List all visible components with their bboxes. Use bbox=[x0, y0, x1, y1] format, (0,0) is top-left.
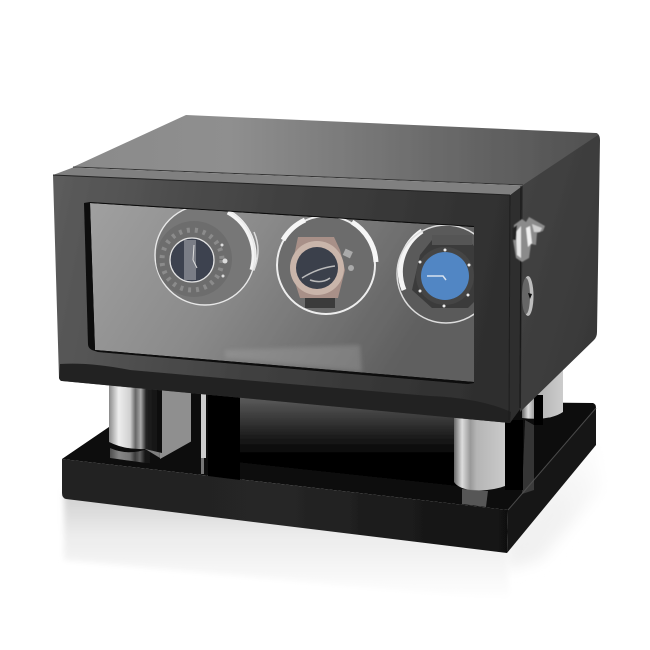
watch 2 bbox=[276, 215, 376, 315]
base right edge bbox=[507, 408, 596, 553]
box right side bbox=[520, 134, 600, 412]
floor reflection shadow bbox=[64, 435, 600, 600]
front bottom dark band bbox=[59, 364, 511, 423]
latch bbox=[513, 217, 545, 262]
watch dial bbox=[421, 252, 469, 300]
watch dial bbox=[170, 238, 214, 282]
base plinth bbox=[62, 400, 596, 553]
pillar: front left bbox=[109, 380, 162, 465]
rose gold case bbox=[291, 237, 345, 298]
glass lower reflection bbox=[225, 345, 362, 372]
pillar: back right bbox=[522, 370, 563, 494]
window frame shadow bbox=[84, 202, 474, 384]
winder ring bbox=[155, 205, 255, 305]
watch dial bbox=[290, 241, 344, 295]
base front edge bbox=[62, 459, 508, 553]
box front panel bbox=[53, 168, 523, 423]
pillar: back left bbox=[191, 390, 208, 474]
winder ring bbox=[398, 225, 468, 314]
winder ring bbox=[278, 217, 370, 312]
pillar: front right bbox=[454, 415, 523, 507]
base top surface bbox=[62, 400, 596, 510]
glass window bbox=[90, 203, 495, 382]
watch 3 bbox=[396, 224, 474, 324]
front lid edge highlight bbox=[53, 168, 523, 195]
product illustration: triple watch winder bbox=[53, 115, 600, 572]
recess under the box bbox=[160, 385, 460, 486]
watch bezel bbox=[156, 221, 232, 297]
key lock bbox=[522, 276, 534, 316]
watch 1 bbox=[155, 205, 258, 305]
watch case bbox=[412, 240, 480, 308]
box top lid bbox=[73, 115, 598, 185]
